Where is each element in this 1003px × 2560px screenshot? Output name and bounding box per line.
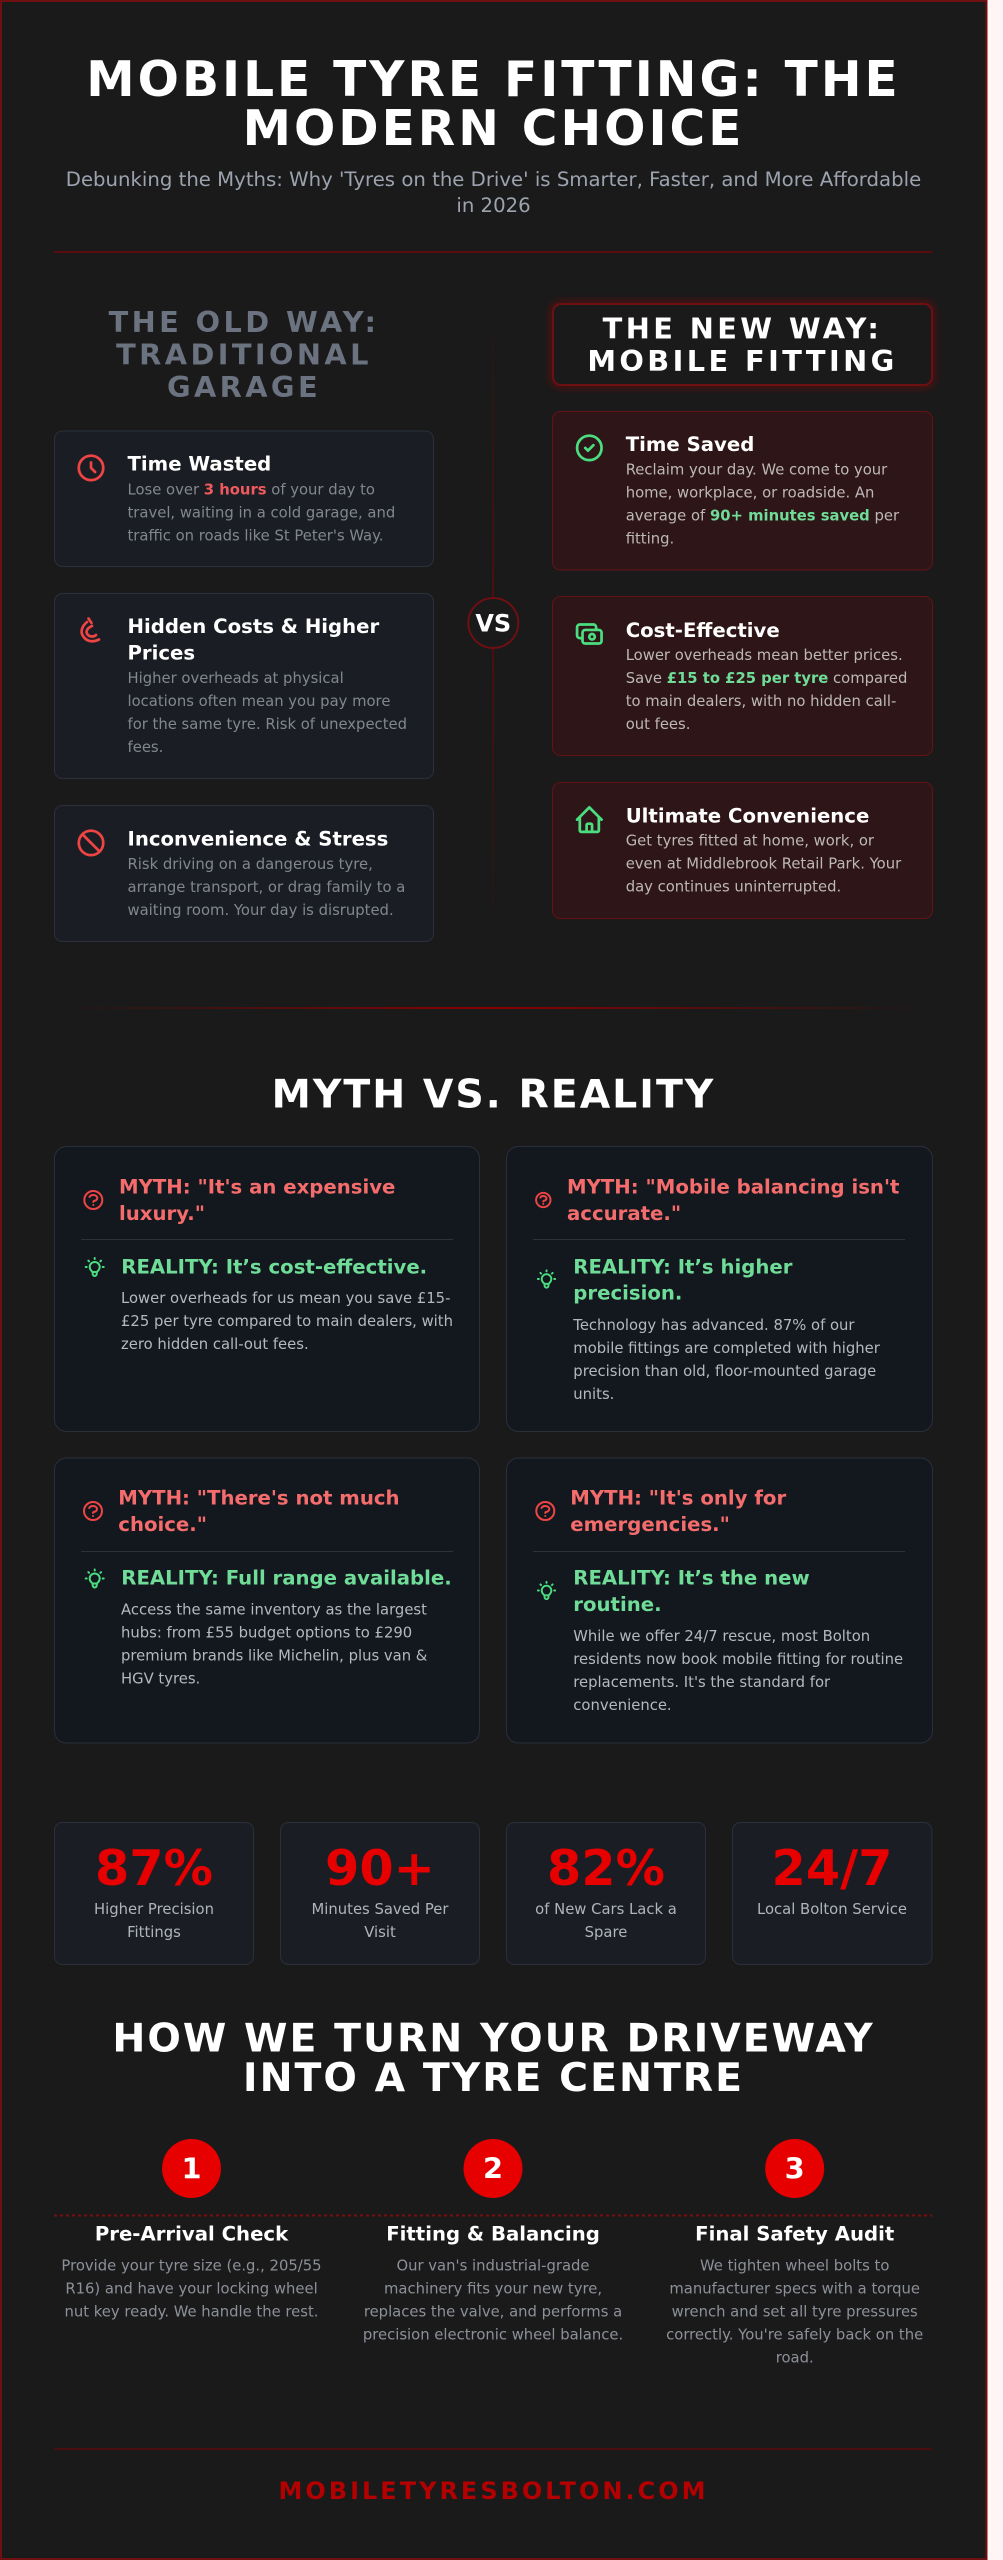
stat: 90+: Minutes Saved Per	[312, 1901, 449, 1918]
new way heading: MOBILE FITTING	[587, 344, 898, 378]
subtitle	[66, 168, 921, 217]
panel: myth balancing: accurate."	[567, 1202, 681, 1225]
step 1	[61, 2139, 322, 2321]
subtitle: in 2026	[456, 194, 531, 217]
panel: myth balancing: precision.	[573, 1282, 682, 1304]
step 1: Pre-Arrival Check	[95, 2223, 289, 2246]
stat: 87%: Higher Precision	[94, 1901, 214, 1918]
step 3: manufacturer specs with a torque	[669, 2281, 920, 2298]
step 1: R16) and have your locking wheel	[65, 2281, 318, 2298]
step 3: We tighten wheel bolts to	[700, 2258, 889, 2275]
step 3	[666, 2139, 923, 2367]
panel: time wasted: travel, waiting in a cold garage, and	[128, 504, 395, 521]
panel: myth choice: HGV tyres.	[121, 1670, 200, 1688]
vs badge: VS	[475, 610, 511, 638]
icon: question	[536, 1193, 550, 1207]
panel: ultimate convenience: even at Middlebrook Retail Park. Your	[626, 856, 902, 873]
panel: myth emergencies: convenience.	[573, 1697, 672, 1714]
panel: hidden costs	[54, 594, 434, 778]
icon: question	[84, 1191, 102, 1209]
panel: myth choice: choice."	[118, 1513, 207, 1536]
panel: myth emergencies: REALITY: It’s the new	[573, 1567, 810, 1590]
header	[66, 52, 921, 217]
stat: 24/7: Local Bolton Service	[757, 1901, 907, 1918]
panel: myth emergencies	[506, 1458, 932, 1743]
old way heading: GARAGE	[167, 370, 321, 404]
heading: how we turn: HOW WE TURN YOUR DRIVEWAY	[112, 2016, 875, 2062]
step 3: wrench and set all tyre pressures	[672, 2304, 918, 2321]
panel: myth choice: Access the same inventory as the largest	[121, 1602, 427, 1619]
panel: hidden costs: Hidden Costs & Higher	[128, 615, 380, 638]
panel: myth expensive: Lower overheads for us mean you save £15-	[121, 1290, 450, 1307]
panel: myth choice	[54, 1458, 480, 1743]
step 3: correctly. You're safely back on the	[666, 2327, 923, 2344]
panel: myth balancing: units.	[573, 1386, 614, 1403]
stat: 82%: of New Cars Lack a	[535, 1901, 677, 1918]
panel: ultimate convenience: Get tyres fitted at home, work, or	[626, 833, 875, 850]
icon: lightbulb	[86, 1570, 104, 1588]
panel: myth balancing: precision than old, floor-mounted garage	[573, 1363, 876, 1380]
icon: ban	[79, 831, 103, 855]
panel: time wasted	[54, 431, 434, 566]
panel: cost effective: Cost-Effective	[626, 619, 780, 642]
stat: 90+	[280, 1822, 480, 1964]
panel: myth choice: MYTH: "There's not much	[118, 1486, 400, 1510]
title: MOBILE TYRE FITTING: THE	[86, 52, 901, 108]
panel: time saved: average of 90+ minutes saved per	[626, 507, 900, 524]
subtitle: Debunking the Myths: Why 'Tyres on the Drive' is Smarter, Faster, and More Affordable	[66, 168, 921, 191]
icon: lightbulb	[538, 1270, 555, 1288]
panel: hidden costs: locations often mean you pay more	[128, 693, 390, 710]
panel: myth emergencies: While we offer 24/7 rescue, most Bolton	[573, 1628, 870, 1645]
step 1: nut key ready. We handle the rest.	[64, 2304, 319, 2321]
panel: myth emergencies: routine.	[573, 1593, 662, 1616]
step 3: 3	[785, 2152, 805, 2186]
panel: myth choice: REALITY: Full range available.	[121, 1567, 452, 1590]
panel: hidden costs: Higher overheads at physical	[128, 670, 344, 687]
step 2: precision electronic wheel balance.	[363, 2327, 623, 2344]
stat: 87%: 87%	[95, 1839, 213, 1897]
stat: 24/7: 24/7	[772, 1839, 892, 1897]
panel: cost effective	[552, 596, 932, 756]
title	[86, 52, 901, 157]
panel: time saved: fitting.	[626, 530, 674, 547]
step 1: 1	[181, 2152, 202, 2186]
panel: myth expensive: MYTH: "It's an expensive	[119, 1175, 395, 1198]
panel: inconvenience: Inconvenience & Stress	[128, 828, 388, 851]
step 2: Fitting & Balancing	[386, 2223, 600, 2246]
step 2: Our van's industrial-grade	[396, 2258, 590, 2275]
panel: ultimate convenience: day continues uninterrupted.	[626, 879, 841, 896]
panel: myth balancing: REALITY: It’s higher	[573, 1255, 793, 1278]
vs badge	[468, 598, 518, 648]
panel: myth expensive: luxury."	[119, 1202, 205, 1225]
step 1: Provide your tyre size (e.g., 205/55	[61, 2258, 322, 2275]
old way heading	[109, 305, 379, 404]
stat: 82%: Spare	[585, 1924, 627, 1941]
panel: ultimate convenience: Ultimate Convenience	[626, 804, 869, 828]
icon: lightbulb	[86, 1258, 104, 1276]
panel: myth emergencies: residents now book mobile fitting for routine	[573, 1651, 903, 1668]
panel: myth choice: premium brands like Michelin, plus van &	[121, 1648, 428, 1665]
panel: time saved: Time Saved	[626, 433, 754, 456]
panel: myth balancing	[506, 1146, 932, 1432]
panel: time wasted: traffic on roads like St Peter's Way.	[128, 527, 383, 544]
panel: cost effective: out fees.	[626, 716, 690, 733]
stat: 90+: 90+	[325, 1839, 435, 1897]
panel: inconvenience: arrange transport, or drag family to a	[128, 879, 405, 896]
panel: myth expensive: zero hidden call-out fees.	[121, 1336, 309, 1353]
panel: ultimate convenience	[552, 782, 932, 918]
icon: question	[536, 1502, 554, 1520]
panel: time wasted: Lose over 3 hours of your day to	[128, 481, 375, 498]
step 2: 2	[483, 2152, 503, 2186]
icon: clock	[79, 456, 103, 480]
icon: flame	[82, 618, 99, 641]
panel: myth balancing: Technology has advanced. 87% of our	[572, 1317, 855, 1334]
stat: 24/7	[732, 1822, 932, 1964]
stat: 87%	[54, 1822, 254, 1964]
stat: 82%: 82%	[547, 1839, 665, 1897]
icon: check circle	[577, 436, 602, 460]
panel: myth balancing: mobile fittings are completed with higher	[573, 1340, 881, 1357]
step 3: Final Safety Audit	[695, 2223, 894, 2246]
step 2: machinery fits your new tyre,	[384, 2281, 602, 2298]
panel: myth expensive	[54, 1146, 480, 1432]
icon: question	[84, 1502, 102, 1520]
heading: how we turn: INTO A TYRE CENTRE	[243, 2055, 744, 2101]
panel: myth emergencies: replacements. It's the standard for	[573, 1674, 831, 1691]
panel: time wasted: Time Wasted	[128, 453, 271, 476]
panel: time saved	[552, 412, 932, 570]
panel: inconvenience: Risk driving on a dangerous tyre,	[128, 856, 373, 873]
panel: time saved: home, workplace, or roadside. An	[626, 484, 874, 501]
heading: how we turn	[112, 2016, 875, 2101]
panel: cost effective: Lower overheads mean better prices.	[626, 647, 903, 664]
panel: myth expensive: £25 per tyre compared to main dealers, with	[121, 1313, 453, 1330]
panel: cost effective: Save £15 to £25 per tyre compared	[626, 670, 907, 687]
panel: hidden costs: for the same tyre. Risk of unexpected	[128, 716, 407, 733]
stat: 82%	[506, 1822, 706, 1964]
panel: hidden costs: Prices	[128, 642, 195, 665]
panel: cost effective: to main dealers, with no hidden call-	[626, 693, 896, 710]
step 2: replaces the valve, and performs a	[364, 2304, 622, 2321]
step 3: road.	[776, 2350, 814, 2367]
panel: inconvenience: waiting room. Your day is disrupted.	[128, 902, 394, 919]
icon: lightbulb	[538, 1582, 555, 1599]
stat: 87%: Fittings	[127, 1924, 181, 1941]
footer url: MOBILETYRESBOLTON.COM	[278, 2477, 708, 2505]
panel: myth emergencies: MYTH: "It's only for	[570, 1486, 786, 1510]
old way heading: THE OLD WAY:	[109, 305, 379, 339]
panel: myth expensive: REALITY: It’s cost-effective.	[121, 1255, 427, 1278]
icon: cash	[577, 624, 602, 644]
panel: myth emergencies: emergencies."	[570, 1513, 730, 1536]
panel: myth balancing: MYTH: "Mobile balancing isn't	[567, 1175, 899, 1198]
stat: 90+: Visit	[364, 1924, 396, 1941]
panel: inconvenience	[54, 806, 434, 942]
panel: myth choice: hubs: from £55 budget options to £290	[121, 1625, 412, 1642]
vertical divider	[492, 300, 494, 946]
panel: hidden costs: fees.	[128, 739, 163, 756]
old way heading: TRADITIONAL	[116, 338, 372, 372]
new way heading	[552, 303, 933, 386]
icon: home	[577, 807, 602, 832]
new way heading: THE NEW WAY:	[603, 312, 882, 346]
step 2	[363, 2139, 623, 2344]
heading: myth vs reality: MYTH VS. REALITY	[272, 1072, 715, 1118]
panel: time saved: Reclaim your day. We come to your	[626, 461, 888, 478]
title: MODERN CHOICE	[243, 101, 744, 157]
